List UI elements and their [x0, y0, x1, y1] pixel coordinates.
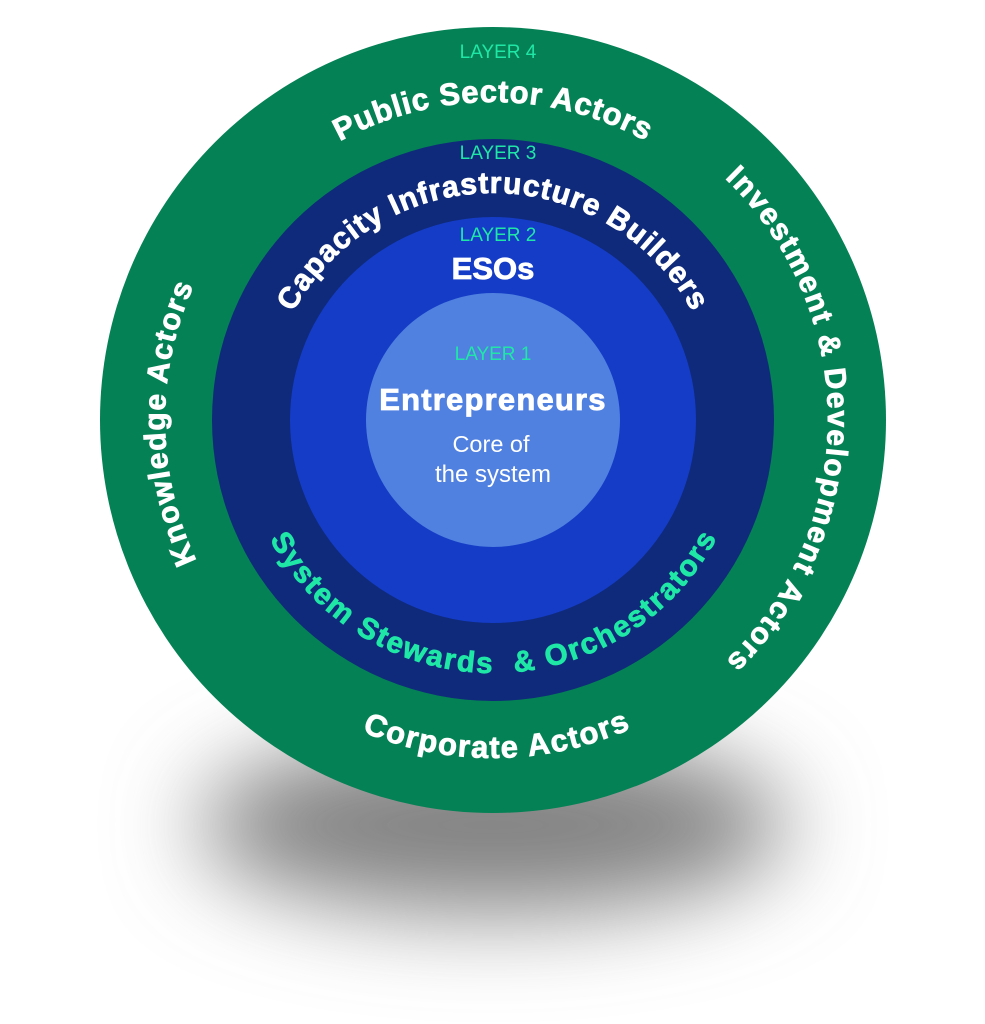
public sector actors label: Public Sector Actors: [331, 82, 650, 141]
core of the system caption: Core of: [452, 431, 530, 457]
layer 1 core circle: [366, 293, 620, 547]
layer 3 ring: [212, 139, 774, 701]
layer 2 circle: [290, 217, 696, 623]
layer 3 label: LAYER 3: [460, 143, 536, 164]
layer 2 label: LAYER 2: [460, 225, 536, 246]
drop shadow: [198, 737, 788, 913]
ESOs label: ESOs: [452, 251, 534, 286]
layer 4 ring: outer actors: [100, 27, 886, 813]
capacity infrastructure builders label: Capacity Infrastructure Builders: [278, 173, 704, 310]
knowledge actors label: Knowledge Actors: [143, 282, 196, 568]
corporate actors label: Corporate Actors: [365, 714, 628, 759]
layer 1 label: LAYER 1: [455, 344, 531, 365]
core of the system caption line 2: the system: [435, 461, 551, 488]
layer 4 label: LAYER 4: [460, 42, 537, 63]
entrepreneurs label: Entrepreneurs: [379, 382, 607, 417]
system stewards and orchestrators label: System Stewards & Orchestrators: [272, 532, 715, 674]
investment and development actors label: Investment & Development Actors: [726, 164, 849, 670]
